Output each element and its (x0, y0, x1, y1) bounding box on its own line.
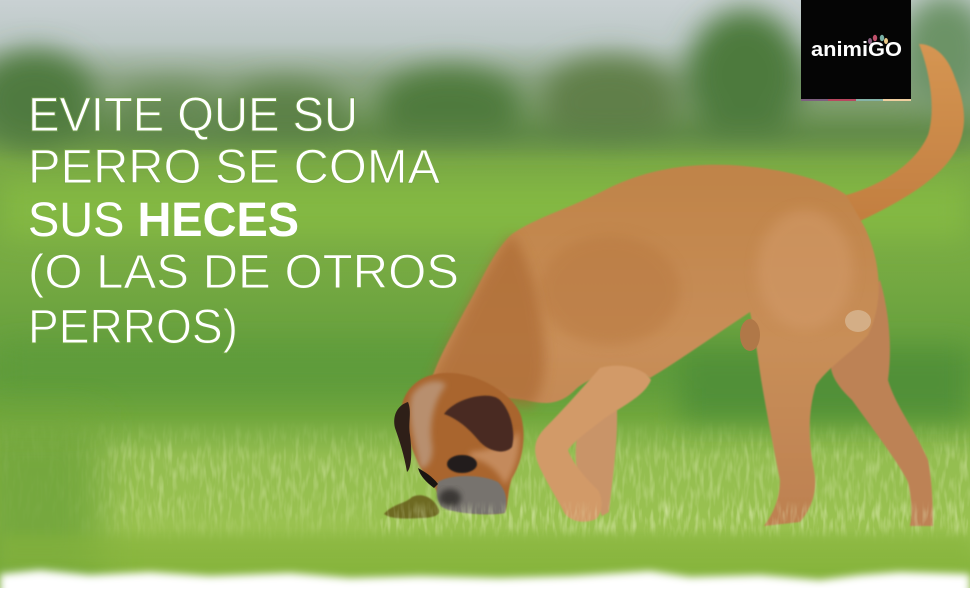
title: PERRO SE COMA (28, 141, 440, 194)
blurred tree line (0, 0, 970, 150)
left blurred strip (0, 420, 100, 590)
body and near hind leg (432, 165, 879, 526)
far hind leg (830, 280, 933, 526)
dropping on the grass (384, 495, 439, 519)
tail (843, 44, 964, 222)
title: PERROS) (28, 301, 238, 354)
head (402, 373, 524, 514)
meadow shading (0, 180, 970, 420)
shoulder shading (540, 235, 680, 345)
muzzle (437, 476, 506, 514)
far front leg (576, 410, 617, 516)
dog (394, 44, 964, 526)
torn white bottom edge (0, 570, 970, 600)
logo badge: animigo (801, 0, 911, 101)
title: SUS HECES (28, 194, 299, 247)
grass blades over paws (380, 502, 968, 535)
title: EVITE QUE SU (28, 89, 358, 142)
eye area (447, 455, 477, 473)
logo color strip (801, 99, 911, 101)
belly sheath (740, 319, 760, 351)
blurred foreground band (0, 535, 970, 569)
near front leg (535, 366, 651, 522)
pale cheek (470, 430, 519, 485)
near ear (444, 396, 513, 452)
title: (O LAS DE OTROS (28, 246, 459, 299)
far ear (394, 402, 411, 472)
nose (418, 468, 438, 488)
title (28, 89, 459, 354)
logo paw dots (868, 35, 888, 44)
grass texture (78, 427, 970, 534)
pale forehead (410, 381, 446, 468)
scrotum (845, 310, 871, 332)
haunch highlight (757, 210, 853, 330)
logo wordmark: animiGO (811, 39, 902, 61)
muzzle shadow (439, 489, 461, 507)
neck (432, 234, 545, 408)
